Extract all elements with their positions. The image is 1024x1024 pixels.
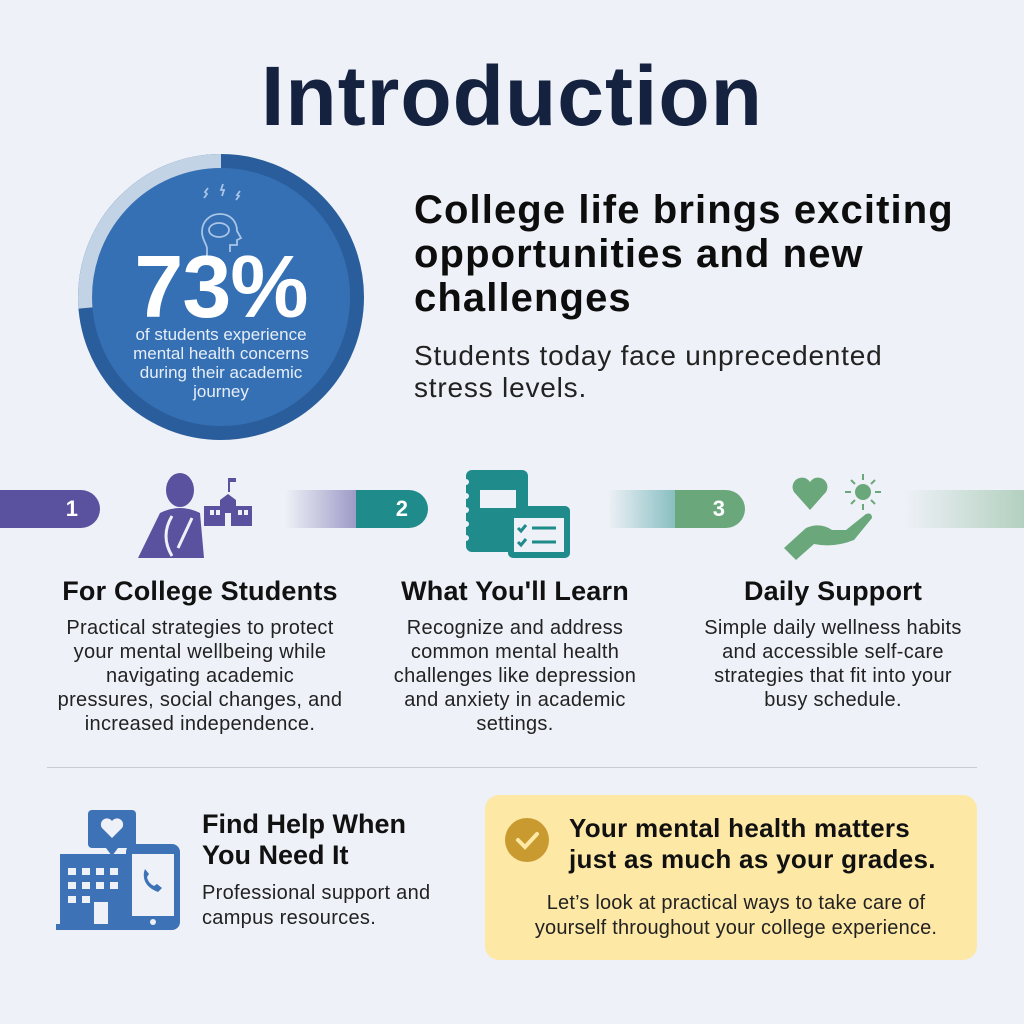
column 2: and anxiety in academic (404, 689, 626, 711)
step bars: 2 (396, 496, 408, 521)
find help text (202, 809, 430, 929)
icon: building with phone (56, 810, 180, 930)
column 2: settings. (476, 713, 554, 735)
column 2 (394, 576, 636, 735)
find help text: campus resources. (202, 907, 376, 929)
icon: heart, sun, hand (784, 474, 881, 560)
column 2: common mental health (411, 641, 619, 663)
stat circle: 73% (134, 237, 308, 336)
stat circle: during their academic (140, 363, 302, 382)
column 1: increased independence. (85, 713, 315, 735)
title: Introduction (261, 49, 763, 143)
column 1: pressures, social changes, and (58, 689, 342, 711)
icon: check (505, 818, 549, 862)
icon: notebook and calendar (466, 470, 570, 558)
column 1: your mental wellbeing while (74, 641, 326, 663)
find help text: Professional support and (202, 882, 430, 904)
subtext: Students today face unprecedented (414, 340, 883, 371)
column 3 (704, 576, 962, 711)
headline: challenges (414, 276, 632, 320)
step bars: 3 (713, 496, 725, 521)
step bars (0, 490, 1024, 528)
column 1: For College Students (62, 576, 338, 606)
step bars: 1 (66, 496, 78, 521)
stat circle (78, 154, 364, 440)
column 3: busy schedule. (764, 689, 902, 711)
column 2: challenges like depression (394, 665, 636, 687)
find help text: Find Help When (202, 809, 406, 839)
callout: mental health matters: Let’s look at practical ways to take care of (547, 892, 925, 914)
stat circle: mental health concerns (133, 344, 309, 363)
column 3: Daily Support (744, 576, 922, 606)
stat circle: of students experience (135, 325, 307, 344)
callout: mental health matters (485, 795, 977, 960)
callout: mental health matters: yourself throughout your college experience. (535, 917, 937, 939)
column 3: Simple daily wellness habits (704, 617, 962, 639)
icon: student and school (138, 473, 252, 558)
subtext: stress levels. (414, 372, 587, 403)
find help text: You Need It (202, 840, 349, 870)
callout: mental health matters: just as much as your grades. (569, 844, 936, 874)
headline (414, 188, 954, 320)
column 1: navigating academic (106, 665, 294, 687)
headline: opportunities and new (414, 232, 864, 276)
column 3: and accessible self-care (722, 641, 944, 663)
column 2: What You'll Learn (401, 576, 629, 606)
headline: College life brings exciting (414, 188, 954, 232)
column 1 (58, 576, 342, 735)
icon: head with brain (202, 184, 241, 256)
column 2: Recognize and address (407, 617, 623, 639)
callout: mental health matters: Your mental health matters (569, 813, 910, 843)
subtext (414, 340, 883, 403)
column 3: strategies that fit into your (714, 665, 952, 687)
column 1: Practical strategies to protect (66, 617, 334, 639)
stat circle: journey (193, 382, 249, 401)
